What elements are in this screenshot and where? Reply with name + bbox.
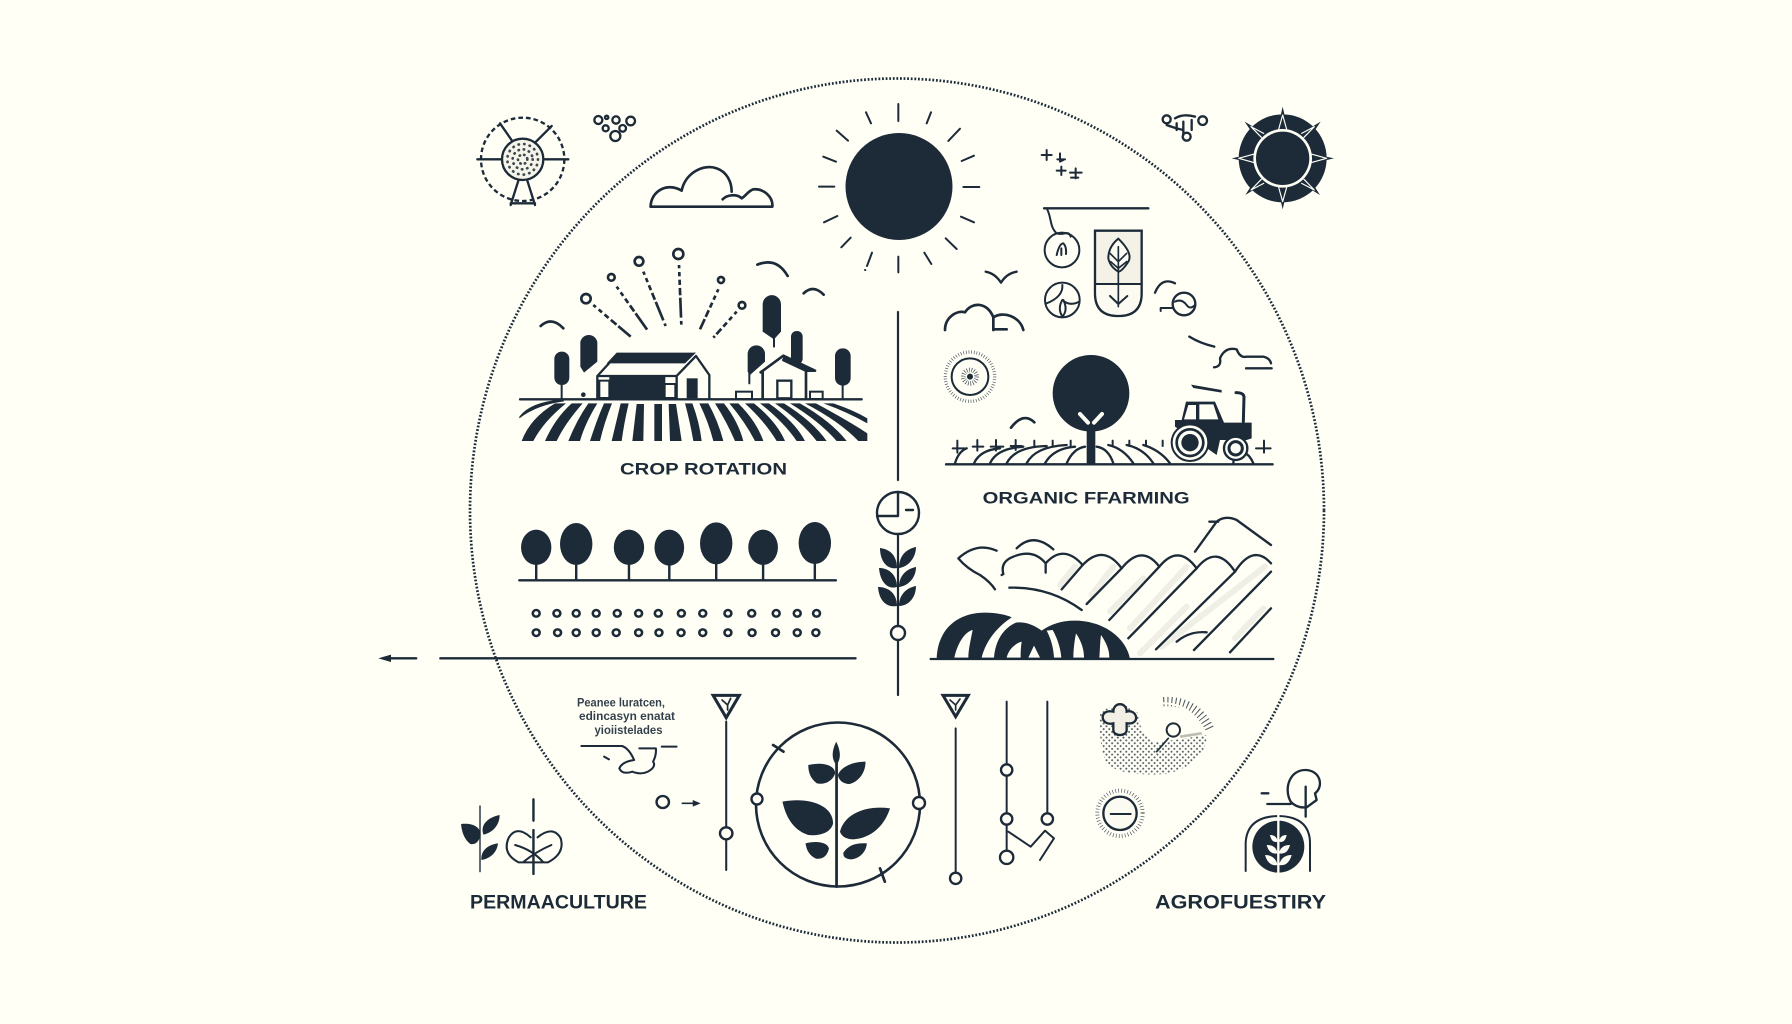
icon: small bird <box>1011 418 1034 428</box>
icon: cloud <box>945 305 1023 330</box>
heading: agroforestry: AGROFUESTIRY <box>1155 892 1326 913</box>
icon: tree row <box>519 522 836 580</box>
icon: seed circle <box>945 352 995 401</box>
dot rows <box>533 610 820 636</box>
icon: minus circle <box>1097 791 1143 836</box>
icon: head profile <box>1262 770 1320 817</box>
icon: organic certification diagram <box>1044 208 1195 317</box>
icon: small sprig <box>461 806 500 872</box>
icon: outline cloud <box>651 167 772 207</box>
icon: bird <box>986 272 1017 283</box>
icon: wind cloud <box>1189 337 1272 368</box>
heading: permaculture: PERMAACULTURE <box>470 892 647 913</box>
icon: branching nodes <box>1000 702 1054 864</box>
panel: agroforestry <box>931 518 1320 884</box>
panel: tree rows and direction line <box>378 522 856 662</box>
icon: ploughed ground with plants <box>946 440 1273 464</box>
icon: hills <box>958 518 1271 653</box>
panel: crop rotation <box>477 116 867 441</box>
panel: organic farming <box>945 107 1334 464</box>
icon: small knot motif <box>594 116 635 141</box>
icon: plus marks <box>1042 150 1082 178</box>
icon: circle arrow <box>657 796 701 808</box>
icon: radiating seed lines <box>581 249 745 338</box>
sun icon <box>819 104 979 272</box>
icon: barn <box>581 353 709 399</box>
icon: farmhouse <box>736 356 823 399</box>
striped field <box>519 399 867 441</box>
icon: outline leaf pair <box>507 799 562 874</box>
arrow: long left line <box>378 655 856 662</box>
heading: crop rotation: CROP ROTATION <box>620 459 787 478</box>
dotted boundary circle <box>470 78 1324 942</box>
text block: permaculture note: Peanee luratcen, <box>577 698 665 710</box>
central vertical line <box>897 312 899 480</box>
icon: central plant in circle <box>752 722 925 887</box>
icon: tree <box>1053 355 1129 464</box>
icon: small knot motif right <box>1163 115 1207 141</box>
icon: triangle marker stem <box>943 695 968 884</box>
icon: dark mounds <box>931 613 1273 659</box>
icon: wheat sprig <box>878 534 916 695</box>
icon: compass sun <box>1232 107 1334 209</box>
icon: tractor <box>1172 385 1252 461</box>
icon: arch with wheat <box>1246 815 1310 874</box>
icon: seed wheel <box>477 118 568 205</box>
text block: permaculture note <box>577 698 675 737</box>
icon: triangle marker stem <box>713 695 739 870</box>
icon: squiggle note <box>581 746 677 773</box>
heading: organic farming: ORGANIC FFARMING <box>983 488 1190 507</box>
icon: clock <box>877 492 919 534</box>
icon: halftone soil blob <box>1100 702 1210 774</box>
icon: birds <box>541 262 824 328</box>
text block: permaculture note: edincasyn enatat <box>579 711 675 723</box>
text block: permaculture note: yioiistelades <box>594 725 662 737</box>
panel: permaculture <box>461 695 739 874</box>
icon: trees <box>554 295 851 399</box>
